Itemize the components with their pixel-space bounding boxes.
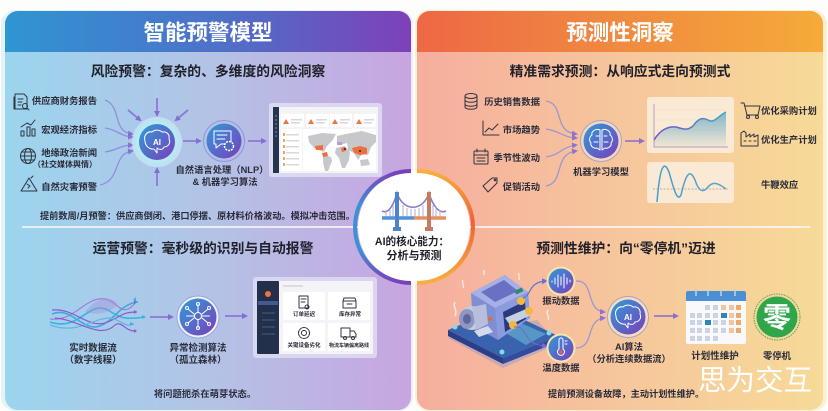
label: 优化采购计划: 优化采购计划 — [761, 105, 817, 116]
icon: calendar — [474, 149, 488, 164]
panel: 智能预警模型 — [1, 10, 413, 411]
label: 促销活动: 促销活动 — [503, 181, 540, 192]
label: 供应商财务报告: 供应商财务报告 — [32, 95, 97, 106]
text: maintenance summary: 提前预测设备故障，主动计划性维护。 — [548, 388, 704, 399]
world map — [308, 131, 376, 171]
icon: financial report — [14, 94, 29, 110]
icon: machine learning model — [580, 120, 622, 162]
demand inputs list — [465, 94, 541, 192]
icon: AI brain: AI — [153, 138, 161, 147]
label: 季节性波动: 季节性波动 — [494, 152, 540, 163]
dashboard: alert console — [253, 277, 377, 358]
label: 库存异常: 库存异常 — [339, 310, 361, 318]
panel: 预测性洞察 — [415, 10, 827, 411]
icon: factory — [741, 131, 758, 146]
label: 历史销售数据: 历史销售数据 — [484, 96, 540, 107]
icon: AI algorithm: AI — [624, 313, 632, 322]
arrows: risk inputs into AI — [100, 98, 265, 186]
label: 机器学习模型: 机器学习模型 — [573, 166, 629, 177]
heading: 预测性洞察: 预测性洞察 — [566, 21, 674, 45]
icon: NLP — [204, 120, 244, 162]
icon: tag — [483, 178, 497, 192]
label: 实时数据流 — [64, 342, 122, 366]
chart: bullwhip effect — [647, 162, 734, 203]
label: 牛鞭效应: 牛鞭效应 — [761, 179, 798, 190]
label: 自然语言处理: & 机器学习算法 — [192, 176, 258, 187]
label: AI算法 — [587, 341, 671, 364]
label: 实时数据流: （数字线程） — [64, 354, 122, 366]
label: 优化生产计划: 优化生产计划 — [761, 134, 817, 145]
label: 异常检测算法: 异常检测算法 — [169, 342, 227, 354]
label: 自然语言处理: 自然语言处理（NLP） — [176, 164, 268, 175]
center badge: AI的核心能力 — [355, 171, 473, 283]
label: 分析与预测: 分析与预测 — [386, 248, 442, 262]
icon: trend — [483, 121, 499, 135]
label: AI算法: AI算法 — [615, 341, 643, 352]
label: 温度数据: 温度数据 — [542, 362, 580, 373]
label: 异常检测算法: （孤立森林） — [169, 354, 227, 366]
label: AI算法: （分析连续数据流） — [587, 353, 671, 364]
outputs list — [741, 103, 817, 190]
label: 自然灾害预警: 自然灾害预警 — [41, 181, 98, 192]
label: 社交媒体舆情: （社交媒体舆情） — [33, 159, 97, 169]
chart: demand forecast — [647, 97, 734, 153]
section heading: 风险预警: 风险预警：复杂的、多维度的风险洞察 — [91, 63, 325, 79]
icon: gear — [298, 328, 310, 338]
heading: 智能预警模型: 智能预警模型 — [143, 21, 273, 45]
icon: AI brain — [132, 117, 182, 167]
icon: database — [465, 94, 477, 109]
icon: vibration data — [546, 266, 576, 296]
section heading: 精准需求预测: 精准需求预测：从响应式走向预测式 — [510, 63, 731, 79]
icon: natural disaster — [21, 176, 37, 191]
section heading: 预测性维护: 预测性维护：向“零停机”迈进 — [536, 240, 716, 256]
label: 振动数据: 振动数据 — [542, 295, 580, 306]
label: 物流车辆偏离路线: 物流车辆偏离路线 — [329, 342, 369, 349]
icon: bridge — [382, 192, 446, 229]
label: AI的核心能力: AI的核心能力： — [375, 235, 449, 248]
watermark: 思为交互: 思为交互 — [698, 358, 812, 399]
icon: inventory box — [343, 298, 356, 308]
arrows: data into AI algorithm — [576, 281, 677, 348]
dashboard: risk map — [269, 103, 382, 177]
label: 异常检测算法 — [169, 342, 227, 366]
icon: temperature data — [546, 334, 576, 362]
illustration: isometric machine — [448, 270, 558, 368]
icon: globe — [20, 148, 36, 164]
risk inputs list — [14, 94, 98, 192]
icon: cart — [741, 103, 760, 118]
chart: real-time data streams — [50, 297, 146, 333]
icon: anomaly detection — [177, 296, 219, 338]
label: 市场趋势: 市场趋势 — [503, 124, 541, 135]
icon: truck — [341, 328, 356, 340]
label: 关键设备劣化: 关键设备劣化 — [287, 341, 321, 349]
label: 自然语言处理 — [176, 164, 268, 187]
arrows: stream to detection to panel — [150, 316, 246, 317]
label: 实时数据流: 实时数据流 — [69, 342, 117, 354]
arrows: demand inputs into model — [546, 101, 643, 186]
label: 宏观经济指标: 宏观经济指标 — [41, 124, 98, 135]
icon: order — [299, 296, 309, 309]
icon: macro indicators — [21, 120, 35, 136]
text: risk summary: 提前数周/月预警：供应商倒闭、港口停摆、原材料价格波动。模拟冲击范围。 — [40, 210, 355, 221]
icon: AI algorithm — [608, 296, 648, 338]
section heading: 运营预警: 运营预警：毫秒级的识别与自动报警 — [93, 240, 314, 256]
label: 零停机: 零停机 — [763, 350, 792, 361]
text: operations summary: 将问题扼杀在萌芽状态。 — [154, 388, 256, 399]
label: 订单延迟: 订单延迟 — [293, 310, 315, 318]
divider lines — [22, 226, 810, 228]
label: 地缘政治新闻: 地缘政治新闻 — [41, 147, 97, 158]
icon: maintenance calendar — [686, 289, 746, 344]
icon: zero downtime: 零 — [763, 302, 791, 333]
label: 计划性维护: 计划性维护 — [691, 350, 739, 362]
icon: zero downtime — [754, 294, 800, 340]
